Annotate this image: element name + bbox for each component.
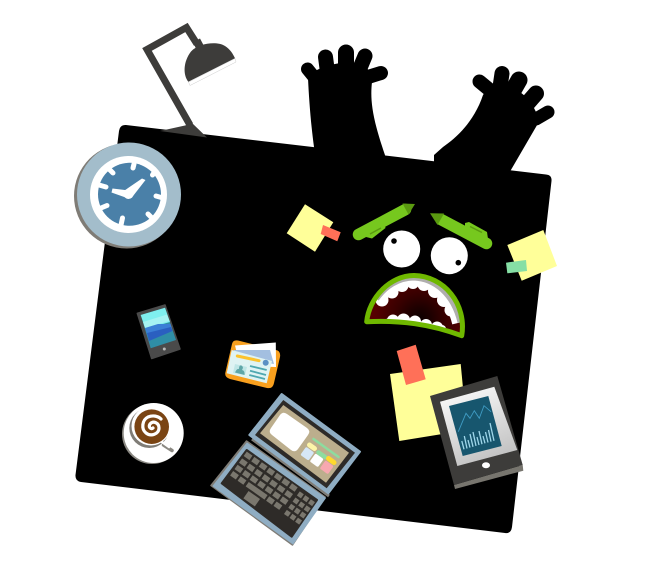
card name bar xyxy=(237,356,259,361)
screen display xyxy=(260,405,349,483)
sticky note top left xyxy=(287,204,341,252)
phone button xyxy=(163,348,166,350)
mouth xyxy=(367,276,462,336)
laptop base edge xyxy=(211,441,325,545)
tablet edge xyxy=(454,465,523,489)
coffee cup on saucer xyxy=(122,403,184,464)
laptop xyxy=(211,394,360,545)
tablet home button xyxy=(482,462,490,468)
green tab xyxy=(506,260,527,273)
id cards folder xyxy=(225,340,280,388)
tablet xyxy=(430,376,523,489)
folder xyxy=(225,340,280,388)
clock ticks xyxy=(99,164,163,225)
right eyebrow xyxy=(430,213,488,244)
saucer xyxy=(122,404,182,464)
phone xyxy=(137,305,180,358)
sticky note right xyxy=(506,230,557,281)
coffee xyxy=(134,409,169,444)
lamp shade rim xyxy=(188,58,236,86)
back paper xyxy=(235,342,276,367)
large sticky note xyxy=(390,345,467,441)
lamp neck xyxy=(193,38,204,51)
clock hands xyxy=(124,178,146,198)
cup shadow xyxy=(129,408,169,448)
lamp arm xyxy=(147,28,197,125)
desk body xyxy=(75,125,552,533)
red tab xyxy=(397,345,426,385)
illustration: overwhelmed desk monster xyxy=(74,22,557,546)
keys xyxy=(224,452,316,533)
screen widgets xyxy=(300,439,338,474)
laptop hinge shadow xyxy=(252,439,329,496)
monster left arm xyxy=(308,52,386,158)
front card xyxy=(227,350,272,383)
clock xyxy=(74,142,181,248)
laptop screen housing xyxy=(249,394,360,493)
card badge xyxy=(263,360,269,366)
monster right arm xyxy=(434,74,548,175)
coffee swirl xyxy=(143,416,161,435)
clock face xyxy=(98,163,161,226)
line chart xyxy=(458,406,491,432)
tablet body xyxy=(430,376,523,485)
phone screen xyxy=(141,308,176,348)
card avatar xyxy=(233,364,247,375)
lamp base xyxy=(160,123,207,138)
cup xyxy=(132,406,170,446)
lamp xyxy=(147,28,236,125)
card text lines xyxy=(249,366,267,379)
phone body xyxy=(137,305,180,358)
left eyebrow xyxy=(358,204,415,238)
lamp shade xyxy=(185,43,235,82)
screen bezel xyxy=(255,400,355,488)
lower teeth xyxy=(386,314,446,328)
left eye xyxy=(383,230,420,268)
clock shadow xyxy=(74,144,179,248)
bar chart xyxy=(462,423,494,449)
tablet screen bezel xyxy=(440,387,517,466)
screen white window xyxy=(270,413,309,451)
red tab xyxy=(321,225,341,241)
clock rim xyxy=(77,142,181,246)
gray gum stripe xyxy=(375,276,462,322)
monster face xyxy=(358,204,488,336)
right eye xyxy=(431,237,468,274)
keyboard xyxy=(222,450,317,537)
laptop base xyxy=(213,443,326,544)
tablet display xyxy=(449,396,502,456)
upper teeth xyxy=(375,276,462,322)
